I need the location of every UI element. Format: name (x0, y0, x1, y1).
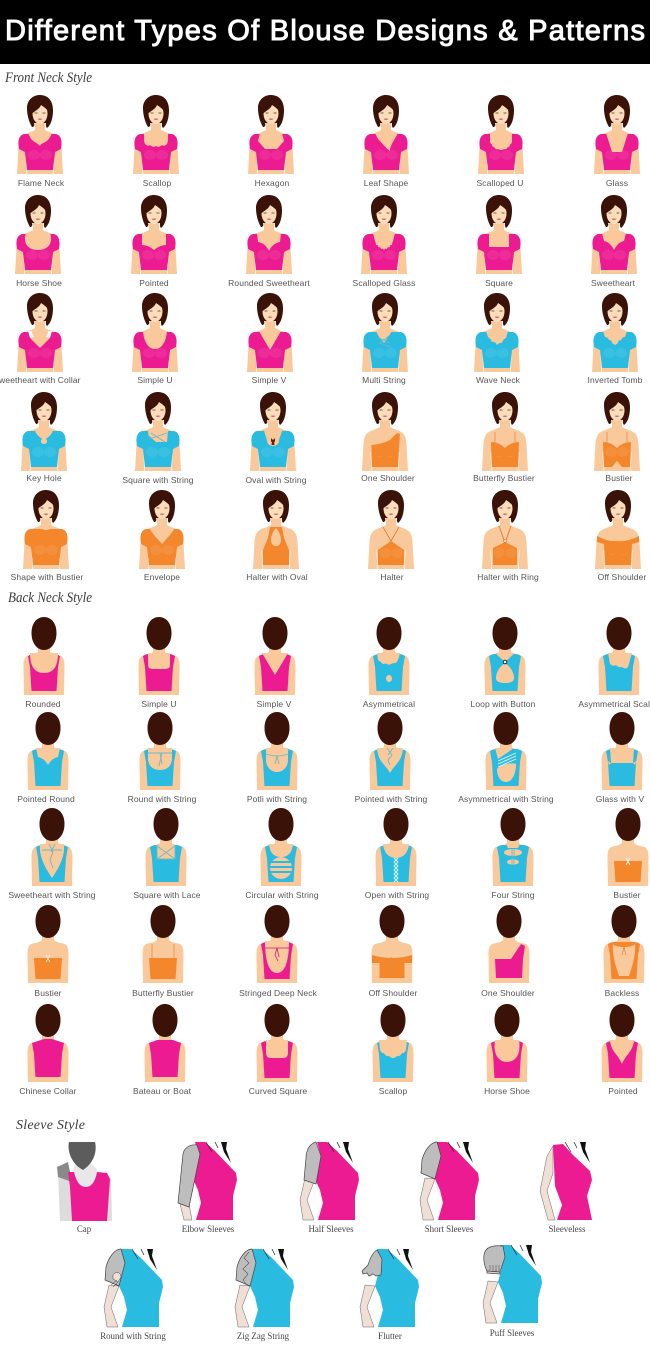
figure: Off Shoulder (595, 490, 646, 582)
figure: Envelope: Envelope (144, 572, 180, 582)
figure: Four String (491, 808, 535, 900)
figure: Wave Neck: Wave Neck (476, 375, 521, 385)
figure: Glass (594, 95, 640, 188)
figure: Leaf Shape: Leaf Shape (364, 178, 408, 188)
figure: Sweetheart with String: Sweetheart with String (8, 890, 96, 900)
figure: Chinese Collar (19, 1004, 77, 1096)
figure: Square with Lace (133, 808, 201, 900)
figure: Loop with Button: Loop with Button (471, 699, 536, 709)
figure: Elbow Sleeves (178, 1142, 237, 1234)
figure: Square (476, 195, 522, 288)
figure: Simple V (247, 293, 293, 385)
figure: Stringed Deep Neck (239, 905, 318, 998)
figure: back Rounded (24, 617, 64, 709)
figure: Halter: Halter (380, 572, 404, 582)
panel: front neck style (0, 70, 646, 582)
figure: back Asymmetrical: Asymmetrical (363, 699, 415, 709)
figure: back Pointed (602, 1004, 642, 1096)
figure: Asymmetrical Scallop (578, 617, 650, 709)
figure: Sleeveless (540, 1142, 592, 1234)
figure: Cap sleeve: Cap (77, 1224, 92, 1234)
figure: Bustier (594, 392, 640, 483)
figure: Flutter sleeve: Flutter (378, 1331, 402, 1341)
figure: Pointed with String: Pointed with String (355, 794, 428, 804)
figure: Sweetheart with Collar (0, 293, 81, 385)
figure: Scalloped Glass: Scalloped Glass (353, 278, 415, 288)
figure: Halter with Ring: Halter with Ring (477, 572, 539, 582)
figure: Simple U (132, 293, 178, 385)
figure: Scallop: Scallop (143, 178, 171, 188)
figure: Half Sleeves: Half Sleeves (308, 1224, 354, 1234)
figure: Multi String: Multi String (362, 375, 406, 385)
figure: back Bustier (608, 808, 648, 900)
figure: Shape with Bustier: Shape with Bustier (11, 572, 83, 582)
figure: Rounded Sweetheart (228, 195, 310, 288)
figure: Open with String (365, 808, 429, 900)
figure: Round with String sleeve (100, 1249, 166, 1341)
figure: back Butterfly Bustier: Butterfly Bustier (132, 988, 194, 998)
figure: back One Shoulder: One Shoulder (481, 988, 535, 998)
figure: Scalloped U: Scalloped U (477, 178, 523, 188)
figure: Multi String (362, 293, 408, 385)
figure: Hexagon: Hexagon (255, 178, 290, 188)
figure: Backless (604, 905, 644, 998)
figure: Circular with String: Circular with String (245, 890, 319, 900)
figure: Pointed with String (355, 712, 428, 804)
figure: Bateau or Boat (133, 1004, 192, 1096)
figure: Horse Shoe: Horse Shoe (16, 278, 62, 288)
figure: back Simple V (254, 617, 296, 709)
title banner (0, 0, 650, 64)
figure: Short Sleeves: Short Sleeves (425, 1224, 474, 1234)
figure: Halter with Ring (477, 490, 539, 582)
figure: Potli with String: Potli with String (247, 794, 307, 804)
figure: Short Sleeves (420, 1142, 479, 1234)
figure: Puff Sleeves: Puff Sleeves (490, 1328, 535, 1338)
figure: One Shoulder (361, 392, 415, 483)
figure: Inverted Tomb: Inverted Tomb (587, 375, 643, 385)
figure: Cap sleeve (57, 1142, 112, 1234)
figure: Hexagon (248, 95, 294, 188)
figure: Pointed (131, 195, 177, 288)
figure: Round with String: Round with String (128, 794, 197, 804)
figure: Sweetheart with String (8, 808, 96, 900)
figure: Elbow Sleeves: Elbow Sleeves (182, 1224, 235, 1234)
figure: Curved Square: Curved Square (249, 1086, 307, 1096)
figure: Asymmetrical with String: Asymmetrical with String (458, 794, 554, 804)
figure: Key Hole (21, 392, 67, 483)
figure: Leaf Shape (363, 95, 409, 188)
figure: Puff Sleeves (483, 1245, 542, 1338)
panel: back neck style (8, 590, 650, 1096)
figure: back One Shoulder (481, 905, 535, 998)
figure: Round with String (128, 712, 197, 804)
figure: back Butterfly Bustier (132, 905, 194, 998)
figure: Square with String (122, 392, 194, 485)
figure: Four String: Four String (491, 890, 535, 900)
figure: Scalloped U (477, 95, 524, 188)
figure: Glass with V (596, 712, 644, 804)
figure: Curved Square (249, 1004, 307, 1096)
figure: back Horse Shoe: Horse Shoe (484, 1086, 530, 1096)
figure: Key Hole: Key Hole (26, 473, 62, 483)
figure: Bateau or Boat: Bateau or Boat (133, 1086, 192, 1096)
figure: Rounded Sweetheart: Rounded Sweetheart (228, 278, 310, 288)
figure: back Bustier: Bustier (613, 890, 641, 900)
figure: Open with String: Open with String (365, 890, 429, 900)
figure: One Shoulder: One Shoulder (361, 473, 415, 483)
figure: back Rounded: Rounded (25, 699, 61, 709)
figure: Pointed: Pointed (139, 278, 169, 288)
figure: Flame Neck: Flame Neck (18, 178, 65, 188)
heading: sleeve style: Sleeve Style (16, 1118, 85, 1133)
figure: Sleeveless: Sleeveless (549, 1224, 586, 1234)
figure: Pointed Round (17, 712, 75, 804)
figure: Zig Zag String sleeve: Zig Zag String (237, 1331, 290, 1341)
figure: Glass with V: Glass with V (596, 794, 644, 804)
figure: Sweetheart: Sweetheart (591, 278, 636, 288)
figure: back Off Shoulder: Off Shoulder (369, 988, 417, 998)
heading: front neck style: Front Neck Style (4, 70, 92, 86)
figure: Chinese Collar: Chinese Collar (19, 1086, 77, 1096)
figure: Half Sleeves (300, 1142, 359, 1234)
figure: back Asymmetrical (363, 617, 415, 709)
figure: Backless: Backless (605, 988, 639, 998)
figure: Flame Neck (17, 95, 65, 188)
figure: Inverted Tomb (587, 293, 643, 385)
figure: Glass: Glass (606, 178, 628, 188)
figure: back Scallop (372, 1004, 414, 1096)
figure: Butterfly Bustier (473, 392, 535, 483)
figure: Oval with String: Oval with String (245, 475, 307, 485)
figure: back Pointed: Pointed (608, 1086, 638, 1096)
figure: Stringed Deep Neck: Stringed Deep Neck (239, 988, 318, 998)
figure: Zig Zag String sleeve (235, 1249, 294, 1341)
figure: Round with String sleeve: Round with String (100, 1331, 166, 1341)
figure: Bustier: Bustier (605, 473, 633, 483)
figure: Butterfly Bustier: Butterfly Bustier (473, 473, 535, 483)
figure: Halter (368, 490, 414, 582)
figure: Asymmetrical with String (458, 712, 554, 804)
figure: Circular with String (245, 808, 319, 900)
heading: back neck style: Back Neck Style (8, 590, 92, 606)
figure: Square with String: Square with String (122, 475, 194, 485)
figure: Halter with Oval (246, 490, 308, 582)
figure: Halter with Oval: Halter with Oval (246, 572, 308, 582)
figure: Wave Neck (474, 293, 521, 385)
figure: back Bustier 2 (28, 905, 68, 998)
figure: Shape with Bustier (11, 490, 83, 582)
figure: Simple U: Simple U (137, 375, 173, 385)
figure: Square: Square (485, 278, 513, 288)
figure: Horse Shoe (15, 195, 62, 288)
figure: Square with Lace: Square with Lace (133, 890, 201, 900)
figure: back Simple U (138, 617, 180, 709)
figure: Envelope (139, 490, 185, 582)
figure: Off Shoulder: Off Shoulder (598, 572, 646, 582)
figure: Simple V: Simple V (252, 375, 287, 385)
figure: Sweetheart (591, 195, 637, 288)
figure: Pointed Round: Pointed Round (17, 794, 75, 804)
panel: sleeve style (16, 1118, 592, 1341)
figure: back Bustier 2: Bustier (34, 988, 62, 998)
figure: back Simple V: Simple V (257, 699, 292, 709)
figure: Scallop (133, 95, 179, 188)
figure: Potli with String (247, 712, 307, 804)
figure: back Horse Shoe (484, 1004, 530, 1096)
figure: Oval with String (245, 392, 307, 485)
figure: Scalloped Glass (353, 195, 415, 288)
title: Different Types Of Blouse Designs & Patterns (5, 15, 645, 47)
figure: Flutter sleeve (360, 1249, 419, 1341)
figure: back Scallop: Scallop (379, 1086, 407, 1096)
figure: back Simple U: Simple U (141, 699, 177, 709)
figure: back Off Shoulder (369, 905, 417, 998)
figure: Loop with Button (471, 617, 536, 709)
